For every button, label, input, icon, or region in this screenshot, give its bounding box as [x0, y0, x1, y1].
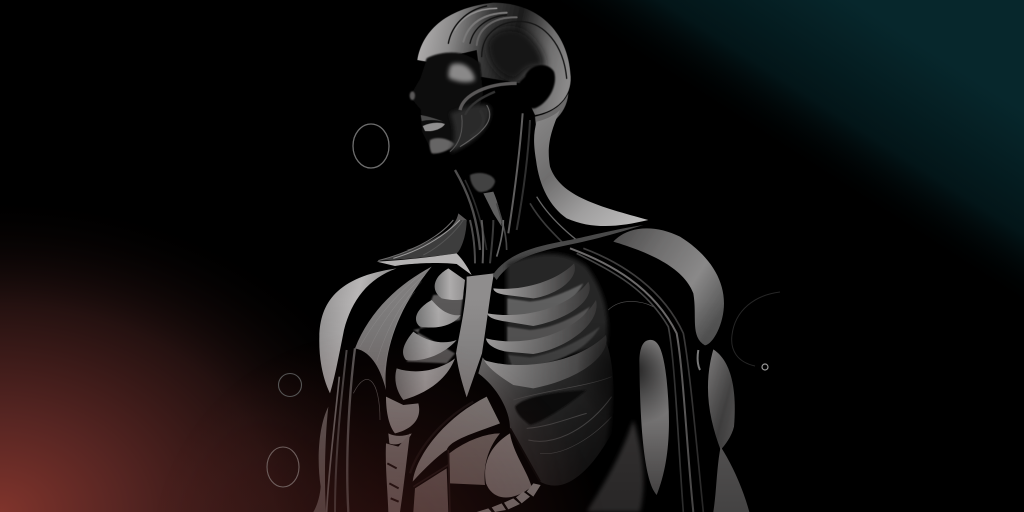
- ear: [518, 65, 555, 108]
- side muscle: [587, 420, 643, 512]
- left shoulder: [319, 268, 397, 393]
- dark inner skull: [487, 28, 545, 80]
- rib inner panel 3: [508, 327, 600, 370]
- trapezius mass left: [378, 220, 467, 261]
- red tint over abdomen: [150, 300, 650, 512]
- rib inner panel 2: [507, 307, 590, 346]
- lower rib opening: [515, 390, 587, 425]
- left rib 3: [403, 332, 457, 360]
- tiny ring: [762, 364, 768, 370]
- left rib 2: [416, 300, 461, 328]
- abdominal seam: [413, 450, 450, 512]
- stomach: [485, 433, 532, 498]
- left ribs: [395, 268, 465, 400]
- lower arm muscle: [713, 447, 749, 512]
- flank notches: [387, 463, 399, 502]
- lower rib arcs: [513, 377, 612, 454]
- hair-like grooves: [448, 6, 567, 78]
- intestine: [477, 483, 541, 512]
- right clavicle: [493, 225, 643, 280]
- trapezius strands left: [378, 220, 503, 263]
- left arm outer muscle: [313, 407, 328, 512]
- lower left ribs: [386, 397, 419, 433]
- shoulder arm strands: [570, 248, 703, 512]
- jaw plane: [450, 104, 490, 153]
- middle ring: [278, 374, 302, 396]
- fan striations: [360, 270, 427, 377]
- rib-to-abdomen edge: [510, 428, 540, 482]
- sternum: [456, 273, 494, 397]
- lower abdominal block: [413, 468, 448, 512]
- skull dome: [417, 3, 571, 115]
- deltoid: [613, 228, 724, 345]
- abdominal block: [449, 433, 500, 485]
- diagonal muscle: [413, 397, 500, 482]
- throat cord: [483, 192, 502, 227]
- torso and arms: [313, 220, 749, 512]
- dark seam: [410, 402, 473, 473]
- lower lip: [423, 123, 445, 131]
- left rib 1: [435, 268, 465, 300]
- rib inner panel 1: [507, 283, 583, 318]
- right rib 3: [486, 300, 597, 354]
- neck back sweep: [534, 94, 568, 126]
- costal arc: [388, 433, 412, 444]
- face shadow mass: [409, 53, 483, 155]
- cheekbone highlight: [448, 63, 475, 82]
- right ribs: [484, 263, 612, 454]
- flank column: [386, 433, 410, 512]
- left pectoral fan: [355, 267, 432, 390]
- adam's apple: [470, 173, 495, 192]
- lower ring: [267, 447, 299, 487]
- left rib 4: [395, 358, 455, 400]
- cheek muscle strands: [450, 83, 517, 152]
- forearm muscle: [708, 349, 735, 450]
- thin curved nerve line: [732, 292, 780, 366]
- neck cords: [455, 113, 577, 250]
- head and neck: [407, 3, 648, 250]
- right rib 4: [484, 335, 607, 388]
- chin: [430, 138, 455, 153]
- left arm strands: [327, 348, 380, 512]
- right rib 2: [487, 282, 590, 326]
- figure: head, neck and torso: [313, 3, 749, 512]
- right rib cage: [478, 343, 614, 486]
- upper cage backing: [507, 254, 608, 367]
- upper arm pill muscle: [639, 340, 669, 495]
- large ring: [353, 124, 389, 168]
- nose tip: [410, 91, 415, 100]
- left clavicle: [377, 253, 472, 275]
- trapezius left: [407, 213, 467, 250]
- upper lip: [421, 115, 443, 122]
- chest shadow: [600, 305, 660, 480]
- right rib 1: [493, 263, 575, 298]
- left rib inner panels: [407, 293, 463, 363]
